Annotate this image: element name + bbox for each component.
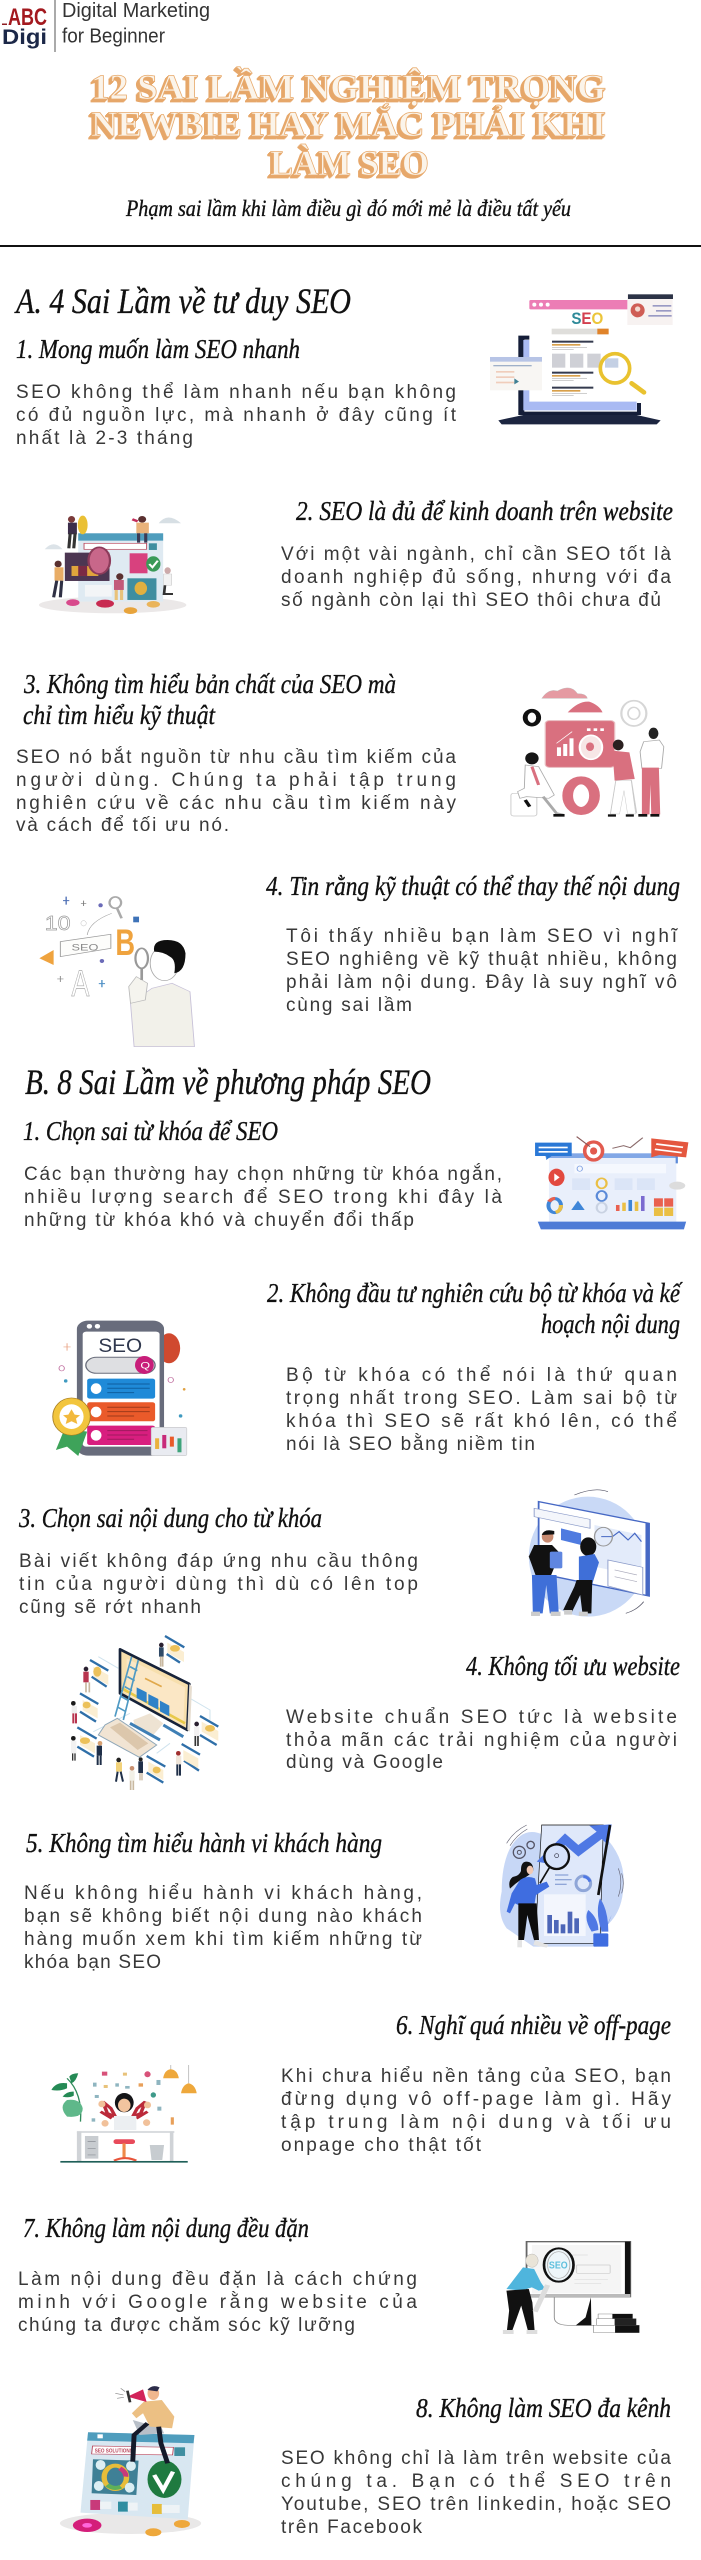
heading B7: 7. Không làm nội dung đều đặn <box>23 2213 309 2243</box>
subtitle: Phạm sai lầm khi làm điều gì đó mới mẻ là điều tất yếu <box>125 196 571 221</box>
text A2 <box>281 544 671 611</box>
icon: couple at dashboard board <box>529 1490 649 1617</box>
text B2: Bộ từ khóa có thể nói là thứ quan <box>286 1365 677 1386</box>
icon: people around SEO window <box>39 516 186 614</box>
text B6: đừng dụng vô off-page làm gì. Hãy <box>281 2089 672 2110</box>
heading A1: 1. Mong muốn làm SEO nhanh <box>16 334 300 364</box>
text B3 <box>19 1551 418 1618</box>
heading: section A: A. 4 Sai Lầm về tư duy SEO <box>14 281 351 321</box>
heading B1: 1. Chọn sai từ khóa để SEO <box>23 1116 278 1146</box>
text A1: SEO không thể làm nhanh nếu bạn không <box>16 382 456 403</box>
text B3: cũng sẽ rớt nhanh <box>19 1597 201 1618</box>
text A4: phải làm nội dung. Đây là suy nghĩ vô <box>286 972 677 993</box>
text B7: chúng ta được chăm sóc kỹ lưỡng <box>18 2315 355 2336</box>
brand logo: ABC <box>8 4 47 31</box>
text B2: khóa thì SEO sẽ rất khó lên, có thể <box>286 1411 677 1432</box>
panel: B8 <box>60 2386 671 2538</box>
panel: B3 <box>18 1490 649 1618</box>
text B7: minh với Google rằng website của <box>18 2291 417 2313</box>
brand logo: for Beginner <box>62 26 165 48</box>
title: 12 SAI LẦM NGHIỆM TRỌNG <box>91 67 606 107</box>
heading: section B: B. 8 Sai Lầm về phương pháp SEO <box>25 1062 431 1102</box>
heading A3: 3. Không tìm hiểu bản chất của SEO mà <box>23 669 396 699</box>
text A1: nhất là 2-3 tháng <box>16 428 193 449</box>
icon: man with magnifier at monitor <box>503 2242 639 2334</box>
text B2: nói là SEO bằng niềm tin <box>286 1433 535 1455</box>
brand logo <box>2 0 210 52</box>
brand logo: Digi <box>2 26 47 49</box>
text A1 <box>16 382 457 449</box>
text B5 <box>24 1883 422 1973</box>
icon: marketer on SEO solutions window <box>60 2386 201 2536</box>
text B1: những từ khóa khó và chuyển đổi thấp <box>24 1210 414 1231</box>
icon: woman multitasking at desk <box>51 2065 197 2163</box>
text A2: số ngành còn lại thì SEO thôi chưa đủ <box>281 590 661 611</box>
text B3: tin của người dùng thì dù có lên top <box>19 1574 418 1595</box>
text B6: onpage cho thật tốt <box>281 2135 482 2156</box>
icon: isometric computer with people <box>71 1636 218 1790</box>
icon: laptop with SEO search <box>490 294 673 424</box>
icon: phone with SEO ranking: SEO <box>98 1334 142 1356</box>
panel: B5 <box>24 1824 624 1973</box>
text B8: SEO không chỉ là làm trên website của <box>281 2448 671 2469</box>
brand logo: Digital Marketing <box>62 0 210 22</box>
text B5: Nếu không hiểu hành vi khách hàng, <box>24 1883 422 1904</box>
icon: man with magnifier at monitor: SEO <box>549 2259 568 2271</box>
heading B2 <box>267 1278 683 1339</box>
text A3 <box>16 746 457 836</box>
panel: B7 <box>18 2213 639 2336</box>
text B2 <box>286 1365 677 1455</box>
icon: phone with SEO ranking <box>53 1321 187 1456</box>
panel: B1 <box>23 1116 688 1231</box>
text B3: Bài viết không đáp ứng nhu cầu thông <box>19 1551 418 1572</box>
text B1: nhiều lượng search để SEO trong khi đây là <box>24 1187 502 1208</box>
text B8: chúng ta. Bạn có thể SEO trên <box>281 2471 671 2492</box>
title: NEWBIE HAY MẮC PHẢI KHI <box>91 104 606 144</box>
title <box>91 67 606 183</box>
icon: team analysing dashboard <box>511 688 664 817</box>
icon: man with magnifier and SEO letters: SEO <box>72 943 99 953</box>
heading B3: 3. Chọn sai nội dung cho từ khóa <box>18 1503 322 1533</box>
text B5: khóa bạn SEO <box>24 1952 161 1973</box>
icon: man with magnifier and SEO letters: 10 <box>45 912 71 935</box>
text A4: Tôi thấy nhiều bạn làm SEO vì nghĩ <box>286 926 678 947</box>
text B4: Website chuẩn SEO tức là website <box>286 1707 677 1728</box>
text A2: Với một vài ngành, chỉ cần SEO tốt là <box>281 544 671 565</box>
text A3: người dùng. Chúng ta phải tập trung <box>16 770 456 791</box>
text A3: nghiên cứu về các nhu cầu tìm kiếm này <box>16 793 457 814</box>
panel: A1 <box>16 294 673 449</box>
text B1: Các bạn thường hay chọn những từ khóa ngắn, <box>24 1163 502 1185</box>
text A4 <box>286 926 678 1016</box>
panel: A2 <box>39 496 673 614</box>
panel: A3 <box>16 669 664 836</box>
icon: man with magnifier and SEO letters: A <box>72 964 89 1004</box>
text B8: trên Facebook <box>281 2517 422 2538</box>
icon: man with magnifier and SEO letters <box>39 897 194 1047</box>
icon: man with magnifier and SEO letters: B <box>115 923 135 963</box>
heading A3 <box>23 669 396 730</box>
text A4: SEO nghiêng về kỹ thuật nhiều, không <box>286 949 677 970</box>
icon: marketer on SEO solutions window: SEO SOLUTIONS <box>95 2448 133 2454</box>
panel: A4 <box>39 871 680 1047</box>
heading B5: 5. Không tìm hiểu hành vi khách hàng <box>26 1828 382 1858</box>
text B2: trọng nhất trong SEO. Làm sai bộ từ <box>286 1388 677 1409</box>
text A3: SEO nó bắt nguồn từ nhu cầu tìm kiếm của <box>16 746 456 768</box>
text B7: Làm nội dung đều đặn là cách chứng <box>18 2269 417 2290</box>
panel: B4 <box>71 1636 680 1790</box>
text B4: thỏa mãn các trải nghiệm của người <box>286 1730 677 1751</box>
title: LÀM SEO <box>270 143 429 183</box>
text B6: Khi chưa hiểu nền tảng của SEO, bạn <box>281 2066 671 2087</box>
text B8: Youtube, SEO trên linkedin, hoặc SEO <box>281 2494 671 2515</box>
icon: analytics dashboard <box>535 1137 688 1229</box>
text B5: hàng muốn xem khi tìm kiếm những từ <box>24 1929 422 1950</box>
text B7 <box>18 2269 417 2336</box>
panel: B2 <box>53 1278 683 1456</box>
text B6 <box>281 2066 672 2156</box>
panel: B6 <box>51 2010 671 2163</box>
text A2: doanh nghiệp đủ sống, nhưng với đa <box>281 567 671 588</box>
text B4: dùng và Google <box>286 1752 443 1773</box>
text A4: cùng sai lầm <box>286 995 412 1016</box>
text A1: có đủ nguồn lực, mà nhanh ở đây cũng ít <box>16 405 457 426</box>
text B1 <box>24 1163 502 1231</box>
text B4 <box>286 1707 677 1773</box>
text B6: tập trung làm nội dung và tối ưu <box>281 2112 671 2133</box>
text B8 <box>281 2448 671 2538</box>
text B5: bạn sẽ không biết nội dung nào khách <box>24 1906 422 1927</box>
icon: phone with SEO ranking: Q <box>140 1361 151 1371</box>
text A3: và cách để tối ưu nó. <box>16 815 229 836</box>
heading A3: chỉ tìm hiểu kỹ thuật <box>23 700 216 730</box>
icon: laptop with SEO search: SEO <box>571 309 603 328</box>
icon: woman examining growth chart <box>500 1824 624 1948</box>
